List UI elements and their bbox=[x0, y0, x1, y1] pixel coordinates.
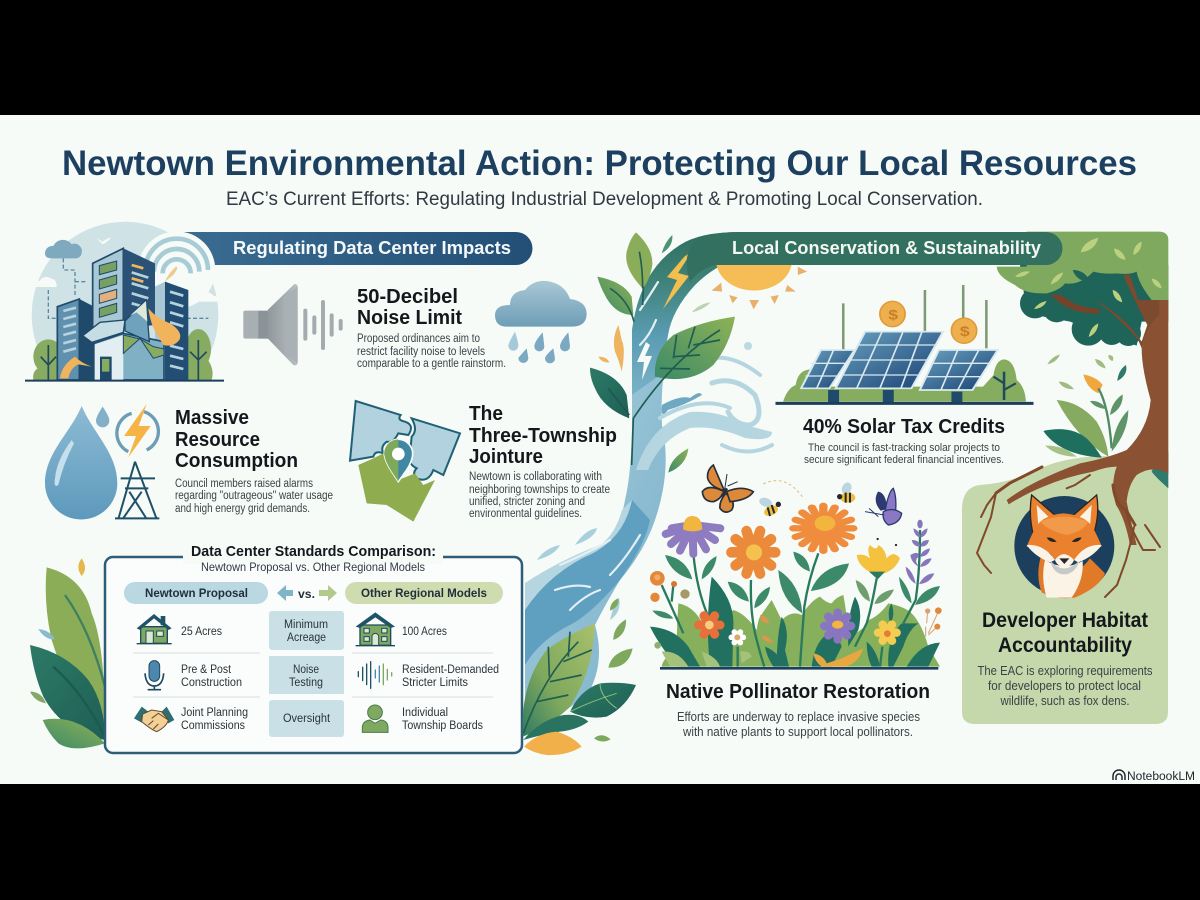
left column values: Joint Planning bbox=[181, 707, 248, 719]
right column values: Resident-Demanded bbox=[402, 664, 499, 676]
flower: orange daisy bbox=[731, 531, 775, 574]
panel heading: Accountability bbox=[998, 634, 1132, 657]
illustration: tree bbox=[997, 232, 1168, 545]
right column values: Township Boards bbox=[402, 720, 483, 732]
panel heading bbox=[982, 609, 1148, 657]
icon: small house bbox=[137, 614, 172, 644]
heading: massive resource consumption: Resource bbox=[175, 428, 260, 451]
text: noise limit description: comparable to a gentle rainstorm. bbox=[357, 358, 506, 370]
text: solar tax credits description: secure significant federal financial incentives. bbox=[804, 454, 1004, 466]
icon: handshake bbox=[134, 707, 174, 732]
text: pollinator description bbox=[677, 710, 920, 739]
heading: massive resource consumption bbox=[175, 406, 298, 472]
decoration: bottom river leaves bbox=[522, 598, 636, 755]
stem leaves bbox=[652, 552, 940, 619]
subtitle: EAC’s Current Efforts: Regulating Industrial Development & Promoting Local Conservation. bbox=[226, 189, 983, 210]
text: noise limit description bbox=[357, 333, 506, 370]
icon: fox bbox=[1014, 495, 1114, 598]
heading: massive resource consumption: Massive bbox=[175, 406, 249, 429]
panel text: wildlife, such as fox dens. bbox=[1000, 694, 1130, 708]
flower: large orange daisy bbox=[793, 506, 853, 551]
text: jointure description: environmental guidelines. bbox=[469, 508, 582, 520]
panel text: The EAC is exploring requirements bbox=[978, 664, 1152, 678]
panel title bbox=[191, 543, 436, 574]
panel text: for developers to protect local bbox=[988, 679, 1141, 693]
heading: 50-decibel noise limit bbox=[357, 286, 462, 329]
text: noise limit description: Proposed ordinances aim to bbox=[357, 333, 480, 345]
heading: three-township jointure: The bbox=[469, 403, 503, 425]
icon: microphone bbox=[145, 661, 164, 690]
icon: solar panels bbox=[775, 285, 1034, 403]
right column values bbox=[402, 626, 499, 732]
icon: speaker with sound waves bbox=[243, 284, 341, 365]
decoration: left foliage bbox=[30, 558, 105, 748]
panel text bbox=[978, 664, 1152, 708]
header pill: newtown proposal: Newtown Proposal bbox=[145, 586, 248, 600]
text: jointure description: Newtown is collaborating with bbox=[469, 471, 602, 483]
row labels: Testing bbox=[289, 677, 323, 689]
panel: developer habitat accountability bbox=[962, 456, 1168, 724]
right column values: Stricter Limits bbox=[402, 677, 468, 689]
row labels: Acreage bbox=[287, 632, 326, 644]
text: resource consumption description: regarding "outrageous" water usage bbox=[175, 490, 333, 502]
text: resource consumption description: Council members raised alarms bbox=[175, 478, 313, 490]
icon: orange butterfly bbox=[702, 465, 753, 512]
left column values: Pre & Post bbox=[181, 664, 232, 676]
left column values: Commissions bbox=[181, 720, 245, 732]
icon: solar panels: $ bbox=[888, 308, 898, 323]
row labels: Oversight bbox=[283, 713, 331, 725]
header: local conservation and sustainability: Local Conservation & Sustainability bbox=[732, 238, 1041, 258]
flower: purple coneflower bbox=[666, 516, 720, 554]
icon: water drop and energy tower bbox=[45, 404, 159, 519]
panel heading: Developer Habitat bbox=[982, 609, 1148, 632]
header pill: newtown proposal bbox=[124, 582, 268, 604]
header pill: other regional models bbox=[345, 582, 503, 604]
text: jointure description bbox=[469, 471, 610, 520]
header pill: other regional models: Other Regional Models bbox=[361, 586, 487, 600]
icon: sound wave bbox=[358, 662, 392, 688]
text: jointure description: unified, stricter zoning and bbox=[469, 496, 585, 508]
decoration: river leaves bbox=[590, 232, 735, 473]
stems bbox=[662, 530, 920, 667]
panel title: Newtown Proposal vs. Other Regional Models bbox=[201, 560, 425, 574]
left column values: 25 Acres bbox=[181, 626, 222, 638]
icon: puzzle map bbox=[350, 401, 460, 522]
icon: solar panels: $ bbox=[960, 325, 970, 340]
heading: three-township jointure: Jointure bbox=[469, 446, 543, 468]
heading: massive resource consumption: Consumption bbox=[175, 449, 298, 472]
foliage background bbox=[650, 577, 940, 667]
flower: lavender bbox=[906, 520, 934, 584]
illustration: tree roots bbox=[977, 467, 1160, 597]
heading: three-township jointure: Three-Township bbox=[469, 425, 617, 447]
left column values bbox=[181, 626, 248, 732]
text: resource consumption description: and high energy grid demands. bbox=[175, 503, 310, 515]
header: regulating data center impacts bbox=[180, 232, 532, 265]
text: resource consumption description bbox=[175, 478, 333, 515]
left column values: Construction bbox=[181, 677, 242, 689]
illustration: pollinator garden bbox=[650, 465, 942, 668]
heading: 50-decibel noise limit: Noise Limit bbox=[357, 307, 462, 329]
versus arrows: vs. bbox=[298, 587, 315, 601]
heading: native pollinator restoration: Native Pollinator Restoration bbox=[666, 681, 930, 703]
right column values: Individual bbox=[402, 707, 448, 719]
heading: 50-decibel noise limit: 50-Decibel bbox=[357, 286, 458, 308]
heading: three-township jointure bbox=[469, 403, 617, 468]
text: solar tax credits description bbox=[804, 442, 1004, 466]
icon: person bbox=[362, 705, 388, 732]
small flowers bbox=[650, 571, 942, 667]
text: noise limit description: restrict facility noise to levels bbox=[357, 346, 485, 358]
text: jointure description: neighboring townships to create bbox=[469, 484, 610, 496]
panel: data center standards comparison bbox=[105, 543, 522, 753]
icon: data center buildings bbox=[25, 222, 224, 381]
header: regulating data center impacts: Regulating Data Center Impacts bbox=[233, 238, 511, 258]
heading: 40% solar tax credits: 40% Solar Tax Credits bbox=[803, 415, 1005, 438]
row labels bbox=[269, 611, 344, 737]
icon: sun bbox=[712, 265, 807, 309]
flower: yellow tulip bbox=[857, 538, 900, 579]
icon: large house bbox=[356, 612, 395, 646]
icon: rain cloud bbox=[495, 281, 587, 363]
text: pollinator description: with native plants to support local pollinators. bbox=[682, 725, 913, 739]
icon: bees bbox=[758, 481, 855, 518]
panel title: Data Center Standards Comparison: bbox=[191, 543, 436, 560]
watermark: notebooklm: NotebookLM bbox=[1127, 771, 1195, 783]
text: solar tax credits description: The council is fast-tracking solar projects to bbox=[808, 442, 1000, 454]
icon: purple butterfly bbox=[865, 488, 902, 525]
row labels: Noise bbox=[293, 664, 319, 676]
text: pollinator description: Efforts are underway to replace invasive species bbox=[677, 710, 920, 724]
title: Newtown Environmental Action: Protecting Our Local Resources bbox=[62, 144, 1137, 183]
page background bbox=[0, 115, 1200, 784]
header: local conservation and sustainability bbox=[687, 232, 1062, 282]
versus arrows bbox=[277, 585, 337, 601]
icon: river and arch bbox=[525, 232, 772, 730]
row labels: Minimum bbox=[284, 619, 328, 631]
right column values: 100 Acres bbox=[402, 626, 447, 638]
